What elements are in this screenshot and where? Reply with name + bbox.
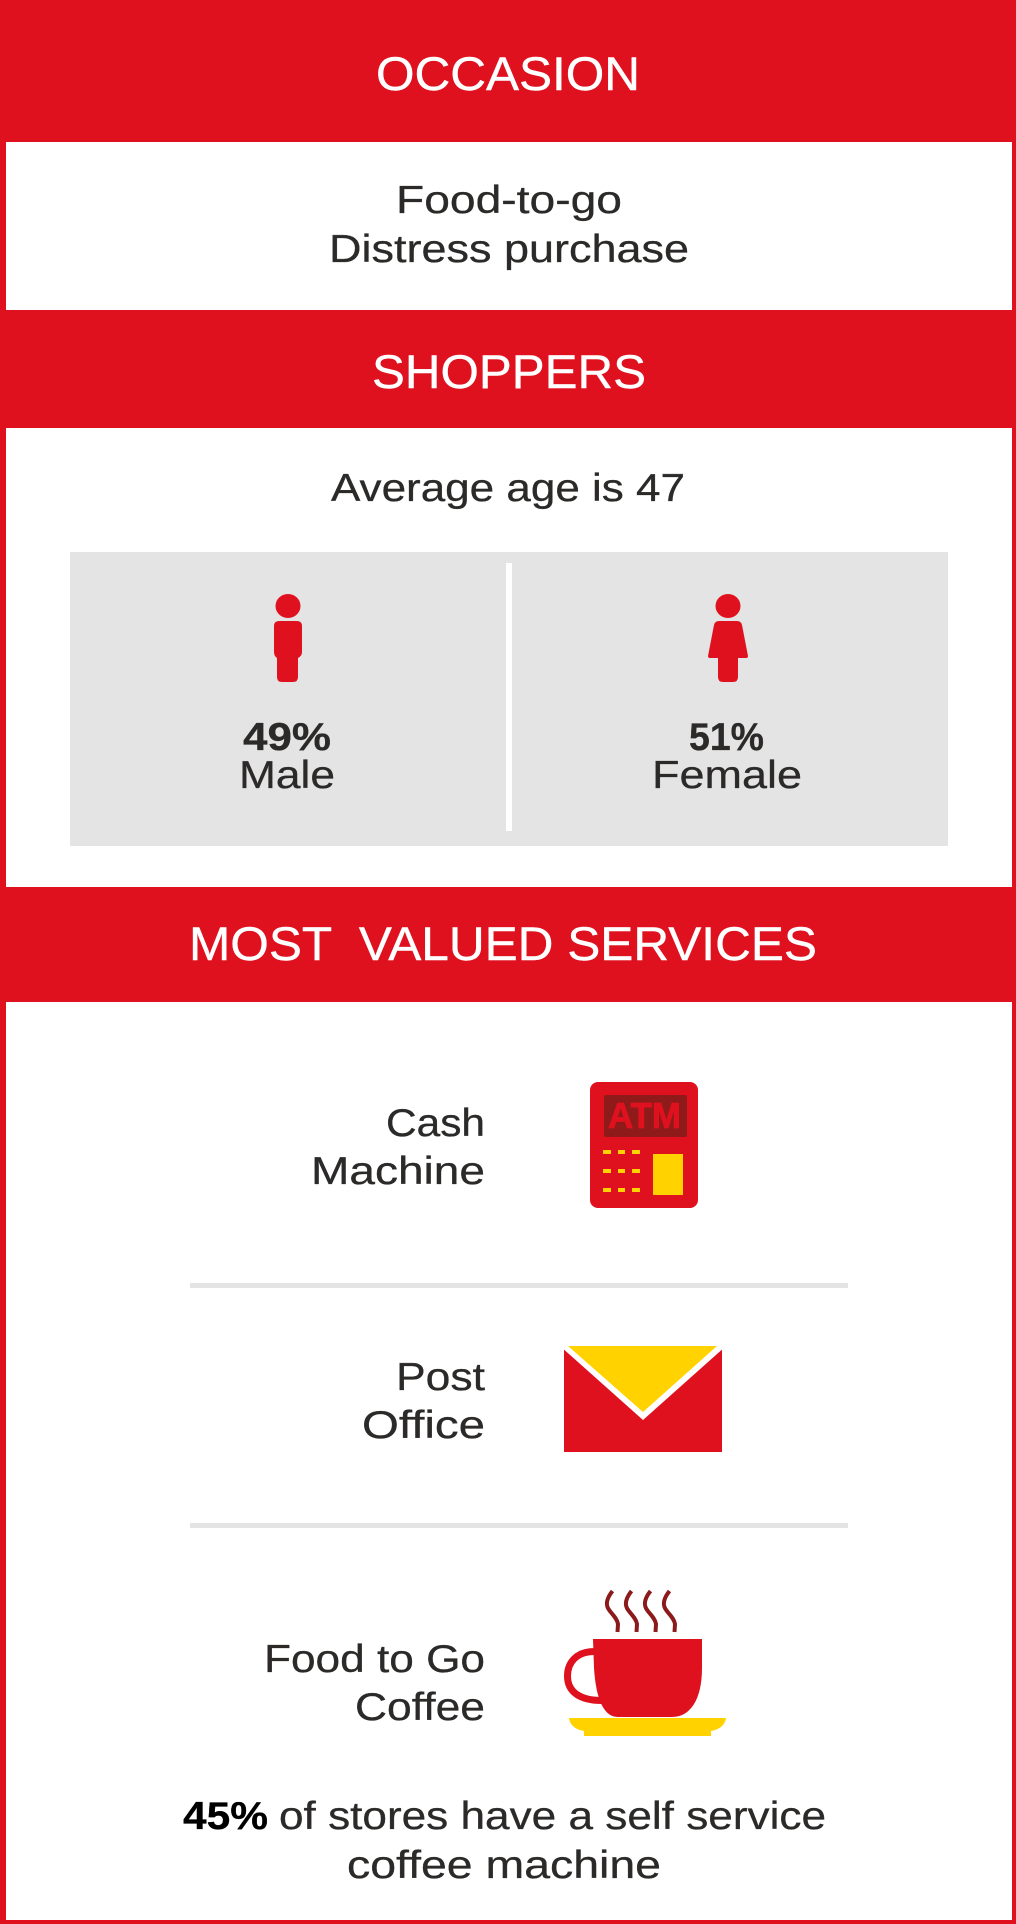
icon: cash machine: ATM (608, 1095, 681, 1136)
cash machine label: Machine (311, 1150, 485, 1193)
male statistic: 49% (243, 716, 331, 759)
heading: occasion: OCCASION (376, 47, 640, 100)
shoppers panel background (6, 428, 1012, 887)
coffee machine statistic (183, 1795, 826, 1887)
gender split panel (70, 552, 948, 846)
food to go coffee label: Food to Go (264, 1638, 485, 1681)
heading: most valued services: MOST VALUED SERVICES (189, 917, 817, 970)
post office label: Office (362, 1404, 485, 1447)
icon: cash machine (590, 1082, 698, 1208)
cash machine label: Cash (386, 1102, 485, 1145)
heading: shoppers: SHOPPERS (372, 345, 646, 398)
post office label: Post (396, 1356, 485, 1399)
male statistic: Male (239, 754, 335, 797)
female statistic: 51% (689, 716, 764, 759)
occasion text (329, 179, 689, 271)
panel: occasion (6, 47, 1012, 310)
occasion text: Food-to-go (396, 179, 622, 222)
male statistic (239, 716, 335, 797)
occasion panel background (6, 142, 1012, 310)
services panel background (6, 1002, 1012, 1920)
average age text: Average age is 47 (331, 467, 685, 510)
panel: shoppers (6, 345, 1012, 887)
icon: coffee cup (568, 1591, 726, 1736)
panel divider (506, 563, 512, 831)
panel: most valued services (6, 917, 1012, 1920)
post office label (362, 1356, 485, 1447)
cash machine label (311, 1102, 485, 1193)
icon: envelope (560, 1340, 726, 1452)
coffee machine statistic: coffee machine (347, 1844, 661, 1887)
icon: male figure (274, 594, 302, 682)
occasion text: Distress purchase (329, 228, 689, 271)
female statistic: Female (652, 754, 802, 797)
food to go coffee label: Coffee (355, 1686, 485, 1729)
coffee machine statistic: of stores have a self service (279, 1795, 826, 1838)
coffee machine statistic: 45% (183, 1795, 268, 1838)
food to go coffee label (264, 1638, 485, 1729)
icon: female figure (708, 594, 748, 682)
female statistic (652, 716, 802, 797)
